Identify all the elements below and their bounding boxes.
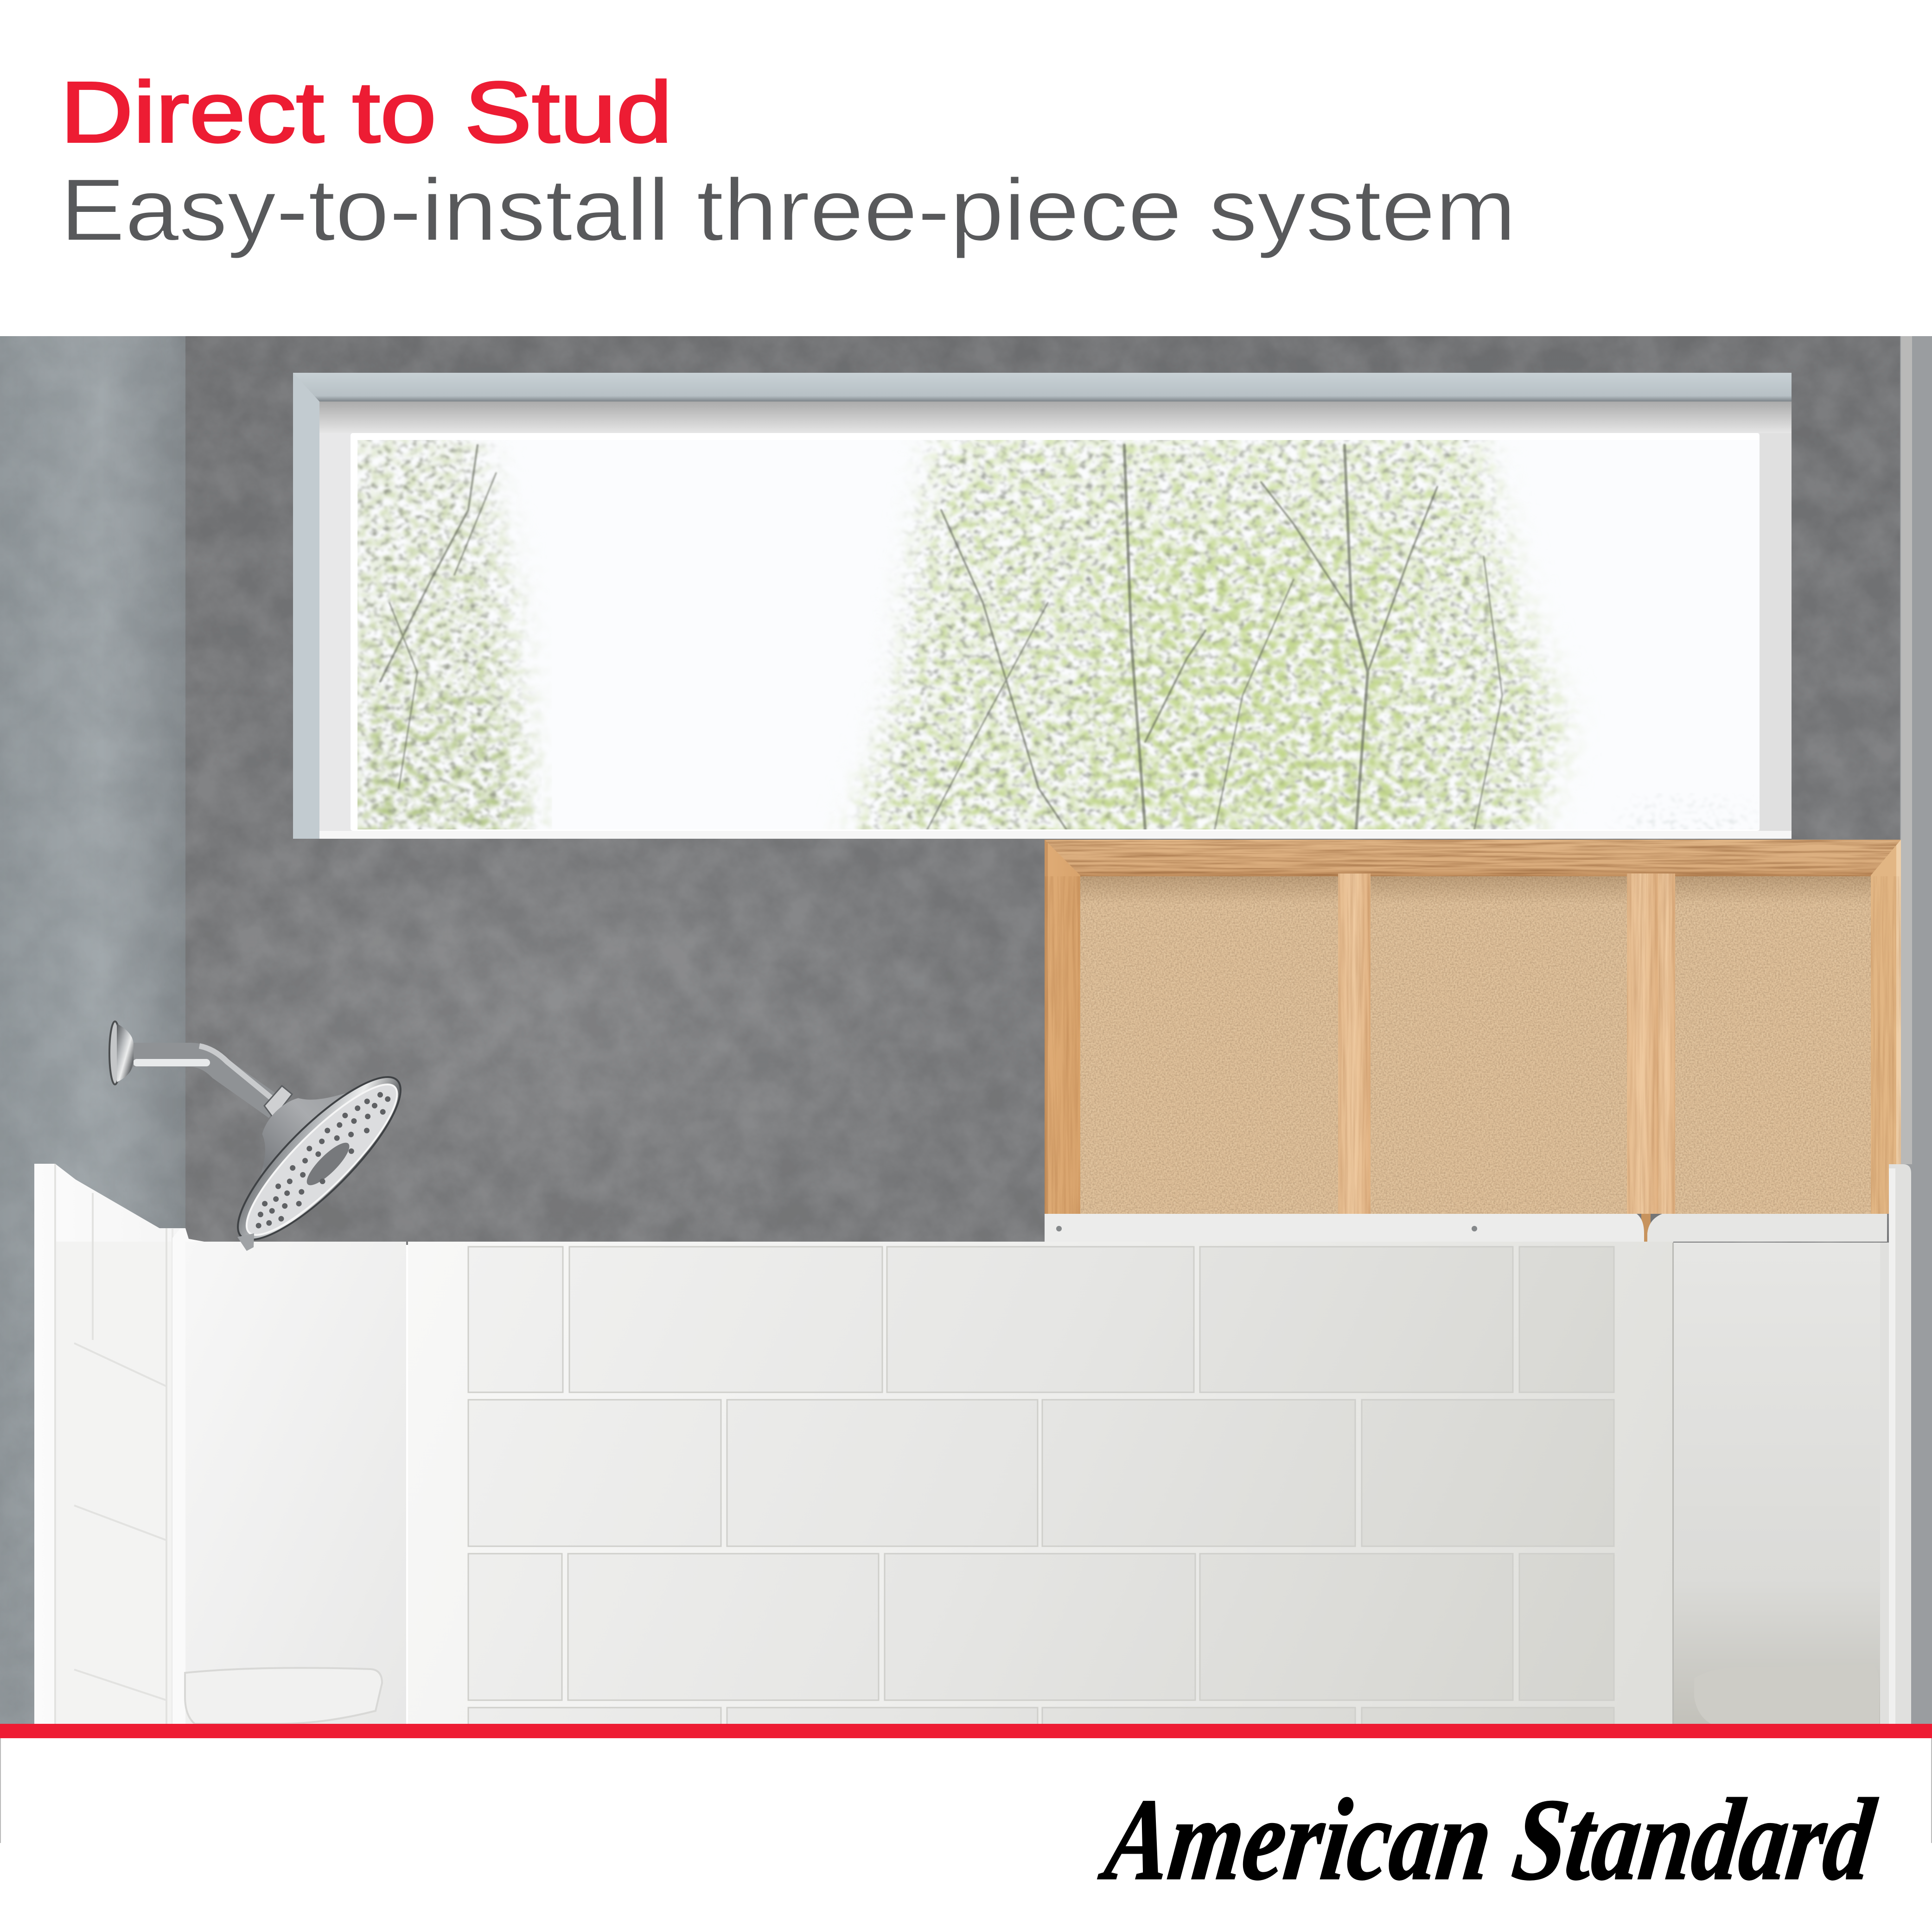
wood stud framing bbox=[1045, 840, 1901, 1214]
concrete back wall bbox=[185, 336, 1900, 1245]
edge line left bbox=[0, 1738, 1, 1843]
arm shadow on wall bbox=[111, 1087, 117, 1187]
shower arm and head bbox=[109, 1021, 420, 1259]
left wall panel bbox=[172, 1228, 406, 1724]
left side panel bbox=[34, 1164, 204, 1724]
left post bbox=[1045, 840, 1080, 1214]
red divider bar bbox=[0, 1724, 1932, 1738]
head body bbox=[197, 1036, 396, 1236]
shower surround panels bbox=[34, 1164, 1911, 1726]
right wall bbox=[1900, 336, 1932, 1725]
right panel edge bbox=[1880, 1164, 1911, 1724]
spray nozzles bbox=[242, 1081, 400, 1239]
shower head bbox=[196, 1035, 420, 1259]
trees outside the window bbox=[343, 427, 1762, 844]
stud two bbox=[1627, 874, 1658, 1214]
window reveal bbox=[293, 373, 1792, 839]
screw left bbox=[1056, 1226, 1062, 1231]
bottom white band bbox=[0, 1738, 1932, 1932]
side panel seams bbox=[55, 1164, 172, 1724]
window glass and sky bbox=[351, 433, 1760, 831]
window bbox=[293, 373, 1792, 844]
face centre bbox=[301, 1137, 355, 1191]
head tab bbox=[237, 1233, 254, 1251]
tree branches bbox=[380, 445, 1502, 829]
connector bbox=[264, 1086, 292, 1118]
right post bbox=[1871, 840, 1901, 1214]
window frame bbox=[319, 402, 1792, 839]
stud one bbox=[1338, 874, 1371, 1214]
back panel bbox=[408, 1242, 1673, 1726]
left wall bbox=[0, 336, 185, 1725]
screw right bbox=[1472, 1226, 1477, 1231]
bathroom scene bbox=[0, 336, 1932, 1726]
right wall panel bbox=[1672, 1243, 1880, 1724]
stud grain bbox=[1045, 874, 1901, 1214]
shower arm bbox=[130, 1046, 276, 1108]
stud three bbox=[1658, 874, 1675, 1214]
right shelf bbox=[1694, 1664, 1879, 1724]
wall flange bbox=[109, 1021, 134, 1084]
left shelf bbox=[185, 1668, 382, 1724]
wall flange behind panels bbox=[1045, 1214, 1887, 1242]
cork sheathing bbox=[1080, 876, 1871, 1214]
head face bbox=[230, 1068, 414, 1251]
subtitle: Easy-to-install three-piece system bbox=[60, 161, 1516, 259]
top plate bbox=[1045, 840, 1901, 876]
subway tiles bbox=[468, 1247, 1614, 1726]
title: Direct to Stud: Direct to Stud bbox=[60, 64, 672, 160]
head rim bbox=[218, 1058, 420, 1259]
edge line right bbox=[1931, 1738, 1932, 1843]
